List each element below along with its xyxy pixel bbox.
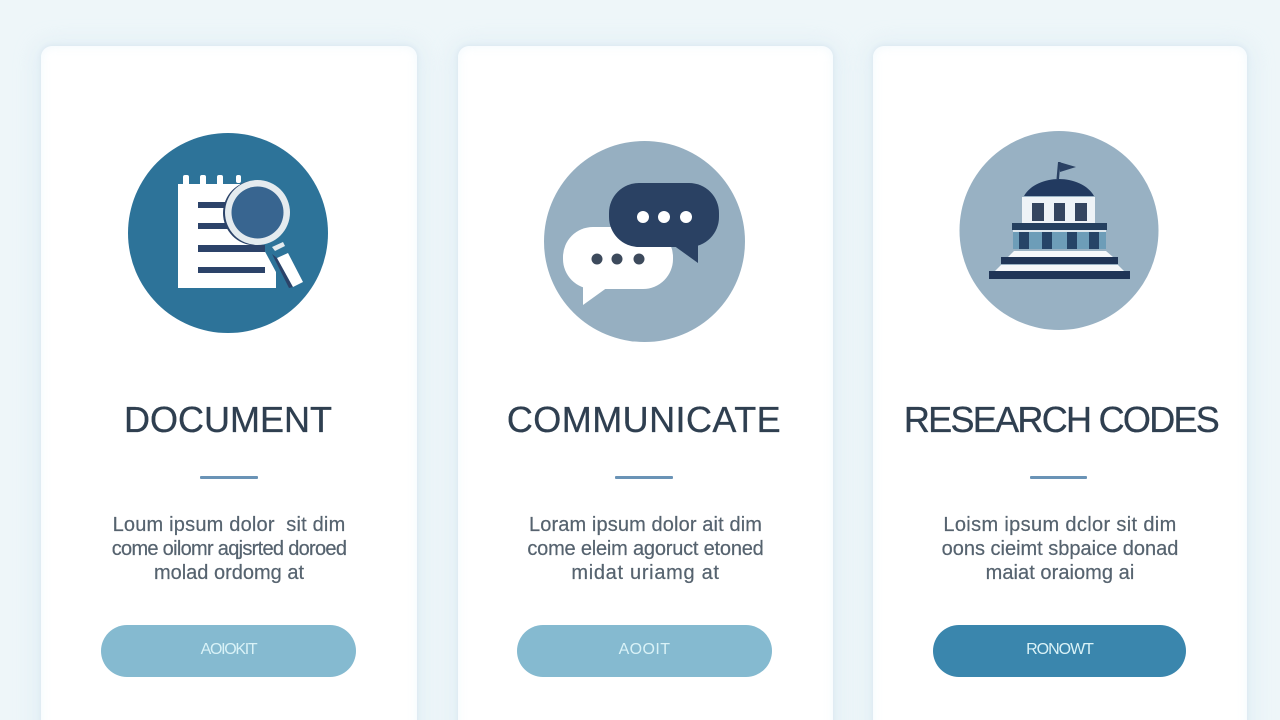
heading: document: DOCUMENT bbox=[124, 399, 332, 440]
panel: research codes bbox=[873, 46, 1247, 720]
icon: notepad with magnifying glass bbox=[128, 133, 328, 333]
heading: communicate: COMMUNICATE bbox=[507, 399, 781, 440]
text block: document: come oilomr aqjsrted doroed bbox=[112, 538, 346, 560]
button: communicate: AOOIT bbox=[619, 641, 670, 658]
text block: document: Loum ipsum dolor sit dim bbox=[113, 514, 345, 536]
text block: research codes: maiat oraiomg ai bbox=[986, 562, 1134, 584]
panel: communicate bbox=[458, 46, 833, 720]
button: research codes: RONOWT bbox=[1026, 641, 1093, 658]
text block: communicate: midat uriamg at bbox=[571, 562, 720, 584]
panel: document bbox=[41, 46, 417, 720]
icon: speech bubbles bbox=[544, 141, 745, 342]
divider: document bbox=[200, 476, 258, 479]
text block: communicate: Loram ipsum dolor ait dim bbox=[529, 514, 762, 536]
divider: communicate bbox=[615, 476, 673, 479]
text block: research codes: oons cieimt sbpaice donad bbox=[942, 538, 1178, 560]
button: document: AOIOKIT bbox=[201, 641, 256, 658]
button: document bbox=[101, 625, 356, 677]
button: communicate bbox=[517, 625, 772, 677]
button: research codes bbox=[933, 625, 1186, 677]
icon: institution building bbox=[960, 131, 1158, 330]
text block: communicate bbox=[527, 514, 764, 584]
text block: document: molad ordomg at bbox=[154, 562, 304, 584]
text block: document bbox=[112, 514, 346, 584]
divider: research codes bbox=[1030, 476, 1087, 479]
text block: communicate: come eleim agoruct etoned bbox=[527, 538, 764, 560]
text block: research codes: Loism ipsum dclor sit dim bbox=[943, 514, 1177, 536]
text block: research codes bbox=[942, 514, 1178, 584]
heading: research codes: RESEARCH CODES bbox=[904, 399, 1218, 440]
